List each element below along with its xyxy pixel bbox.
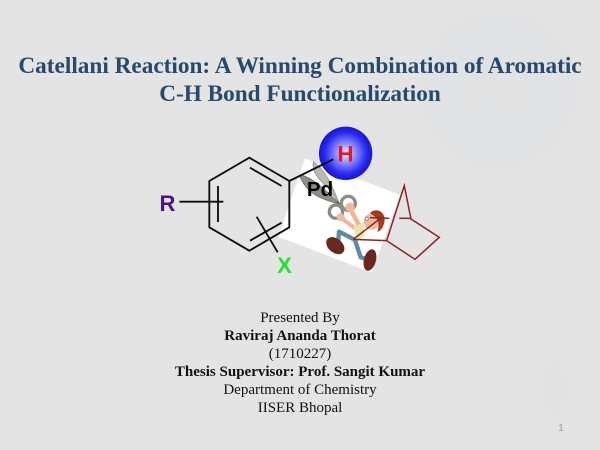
presenter details [175,310,425,416]
label: X: X [277,253,292,278]
icon: cartoon man [323,203,385,272]
presenter details: Raviraj Ananda Thorat [224,328,376,344]
presenter details: Thesis Supervisor: Prof. Sangit Kumar [175,364,425,380]
white cartoon panel [278,158,400,273]
title [18,53,582,107]
presenter details: Presented By [260,310,340,326]
blue hydrogen sphere [319,127,372,180]
page number: 1 [558,423,564,434]
label: Pd: Pd [307,178,333,201]
presenter details: IISER Bhopal [258,400,342,416]
icon: scissors [299,162,355,218]
label: R: R [160,191,176,216]
norbornene [353,186,439,259]
presenter details: Department of Chemistry [223,382,377,398]
title: Catellani Reaction: A Winning Combination of Aromatic [18,53,582,79]
label: H: H [337,142,354,166]
title: C-H Bond Functionalization [159,81,441,107]
presenter details: (1710227) [269,346,331,362]
benzene ring [179,158,333,252]
